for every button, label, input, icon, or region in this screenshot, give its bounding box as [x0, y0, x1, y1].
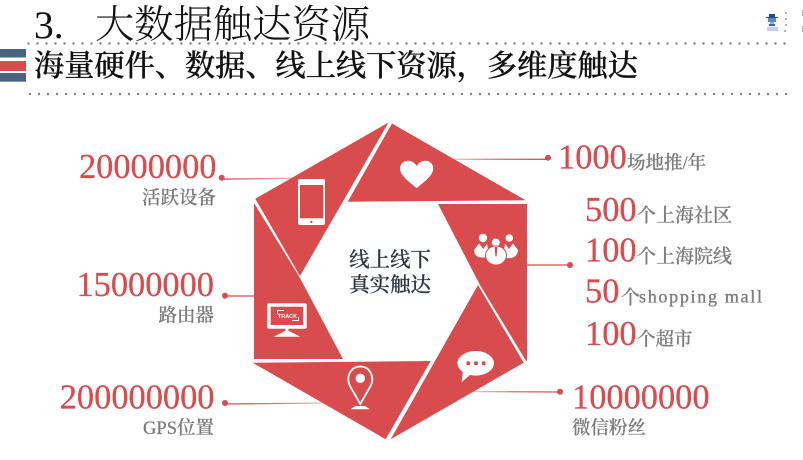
icon: detective logo	[766, 14, 778, 31]
segment: gps	[253, 361, 431, 439]
icon: tracking monitor	[267, 303, 307, 337]
item: supermarkets	[585, 315, 693, 353]
segment: venue	[348, 124, 526, 202]
item: cinemas	[585, 232, 732, 270]
icon: tablet	[298, 179, 325, 225]
stat: wechat followers: 10000000	[572, 378, 710, 416]
stat: venues per year: 1000	[558, 138, 627, 176]
segment: wechat	[391, 285, 524, 439]
item: communities	[585, 191, 732, 229]
item: communities: 个上海社区	[637, 204, 732, 226]
center label: 真实触达	[349, 274, 431, 297]
stat: venues per year: 场地推/年	[627, 152, 706, 174]
item: shopping malls: shopping mall	[639, 286, 762, 306]
title: 3.	[34, 3, 64, 47]
item: supermarkets: 100	[585, 315, 637, 353]
stat: active devices: 活跃设备	[142, 188, 216, 209]
stat list: offline resources	[585, 191, 762, 353]
icon: tracking monitor: TRACK	[278, 314, 297, 320]
item: shopping malls: 个	[621, 286, 640, 308]
center label	[349, 249, 431, 297]
title: 大数据触达资源	[95, 3, 371, 47]
stat: routers	[76, 266, 214, 326]
stat: GPS locations	[60, 378, 214, 439]
icon: heart	[400, 161, 433, 188]
item: shopping malls	[585, 273, 762, 311]
stat: venues per year	[558, 138, 706, 176]
item: supermarkets: 个超市	[637, 328, 693, 350]
stat: wechat followers: 微信粉丝	[572, 418, 646, 439]
icon: chat bubble	[457, 351, 494, 382]
stat: GPS locations: 200000000	[60, 378, 214, 416]
item: shopping malls: 50	[585, 273, 619, 311]
item: communities: 500	[585, 191, 637, 229]
icon: people	[474, 234, 518, 265]
center label: 线上线下	[349, 249, 431, 272]
leader lines	[219, 155, 573, 406]
page edge marks	[784, 10, 803, 32]
hexagon diagram	[253, 122, 527, 439]
stat: routers: 路由器	[158, 306, 214, 326]
segment: community	[438, 204, 527, 361]
segment: router	[254, 203, 343, 359]
stat: GPS locations: GPS位置	[143, 418, 214, 439]
item: cinemas: 个上海院线	[637, 246, 732, 268]
stat: active devices: 20000000	[79, 148, 216, 186]
segment: device	[255, 122, 388, 276]
subtitle: 海量硬件、数据、线上线下资源，多维度触达	[34, 49, 639, 84]
stat: wechat followers	[572, 378, 710, 439]
stat: routers: 15000000	[76, 266, 214, 304]
icon: striped header tab	[0, 49, 26, 82]
icon: location pin	[348, 366, 372, 409]
stat: active devices	[79, 148, 216, 209]
item: cinemas: 100	[585, 232, 637, 270]
